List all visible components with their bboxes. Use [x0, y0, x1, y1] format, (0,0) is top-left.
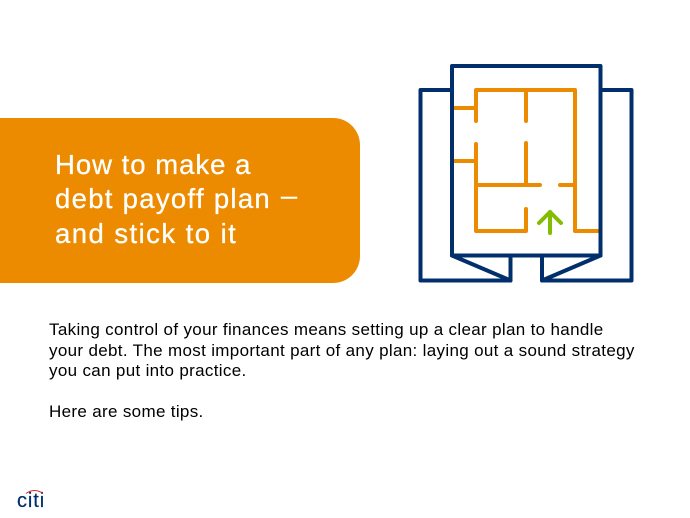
- intro text block: Taking control of your finances means setting up a clear plan to handle: [49, 320, 604, 339]
- logo red arc: [26, 490, 44, 494]
- intro text block: you can put into practice.: [49, 361, 247, 380]
- title heading: debt payoff plan —: [55, 183, 297, 214]
- title heading: [55, 148, 298, 248]
- navy folder outline: [420, 66, 632, 280]
- icon: floor plan maze: [418, 64, 634, 283]
- intro text block: your debt. The most important part of any plan: laying out a sound strategy: [49, 340, 635, 360]
- green arrow: [539, 212, 561, 233]
- title heading: and stick to it: [55, 218, 237, 248]
- logo wordmark: citi: [17, 490, 45, 512]
- title panel: [0, 118, 360, 283]
- intro text block: [49, 320, 635, 421]
- intro text block: Here are some tips.: [49, 402, 204, 421]
- title heading: How to make a: [55, 148, 251, 180]
- citi logo: [17, 490, 45, 512]
- orange maze walls: [454, 90, 598, 231]
